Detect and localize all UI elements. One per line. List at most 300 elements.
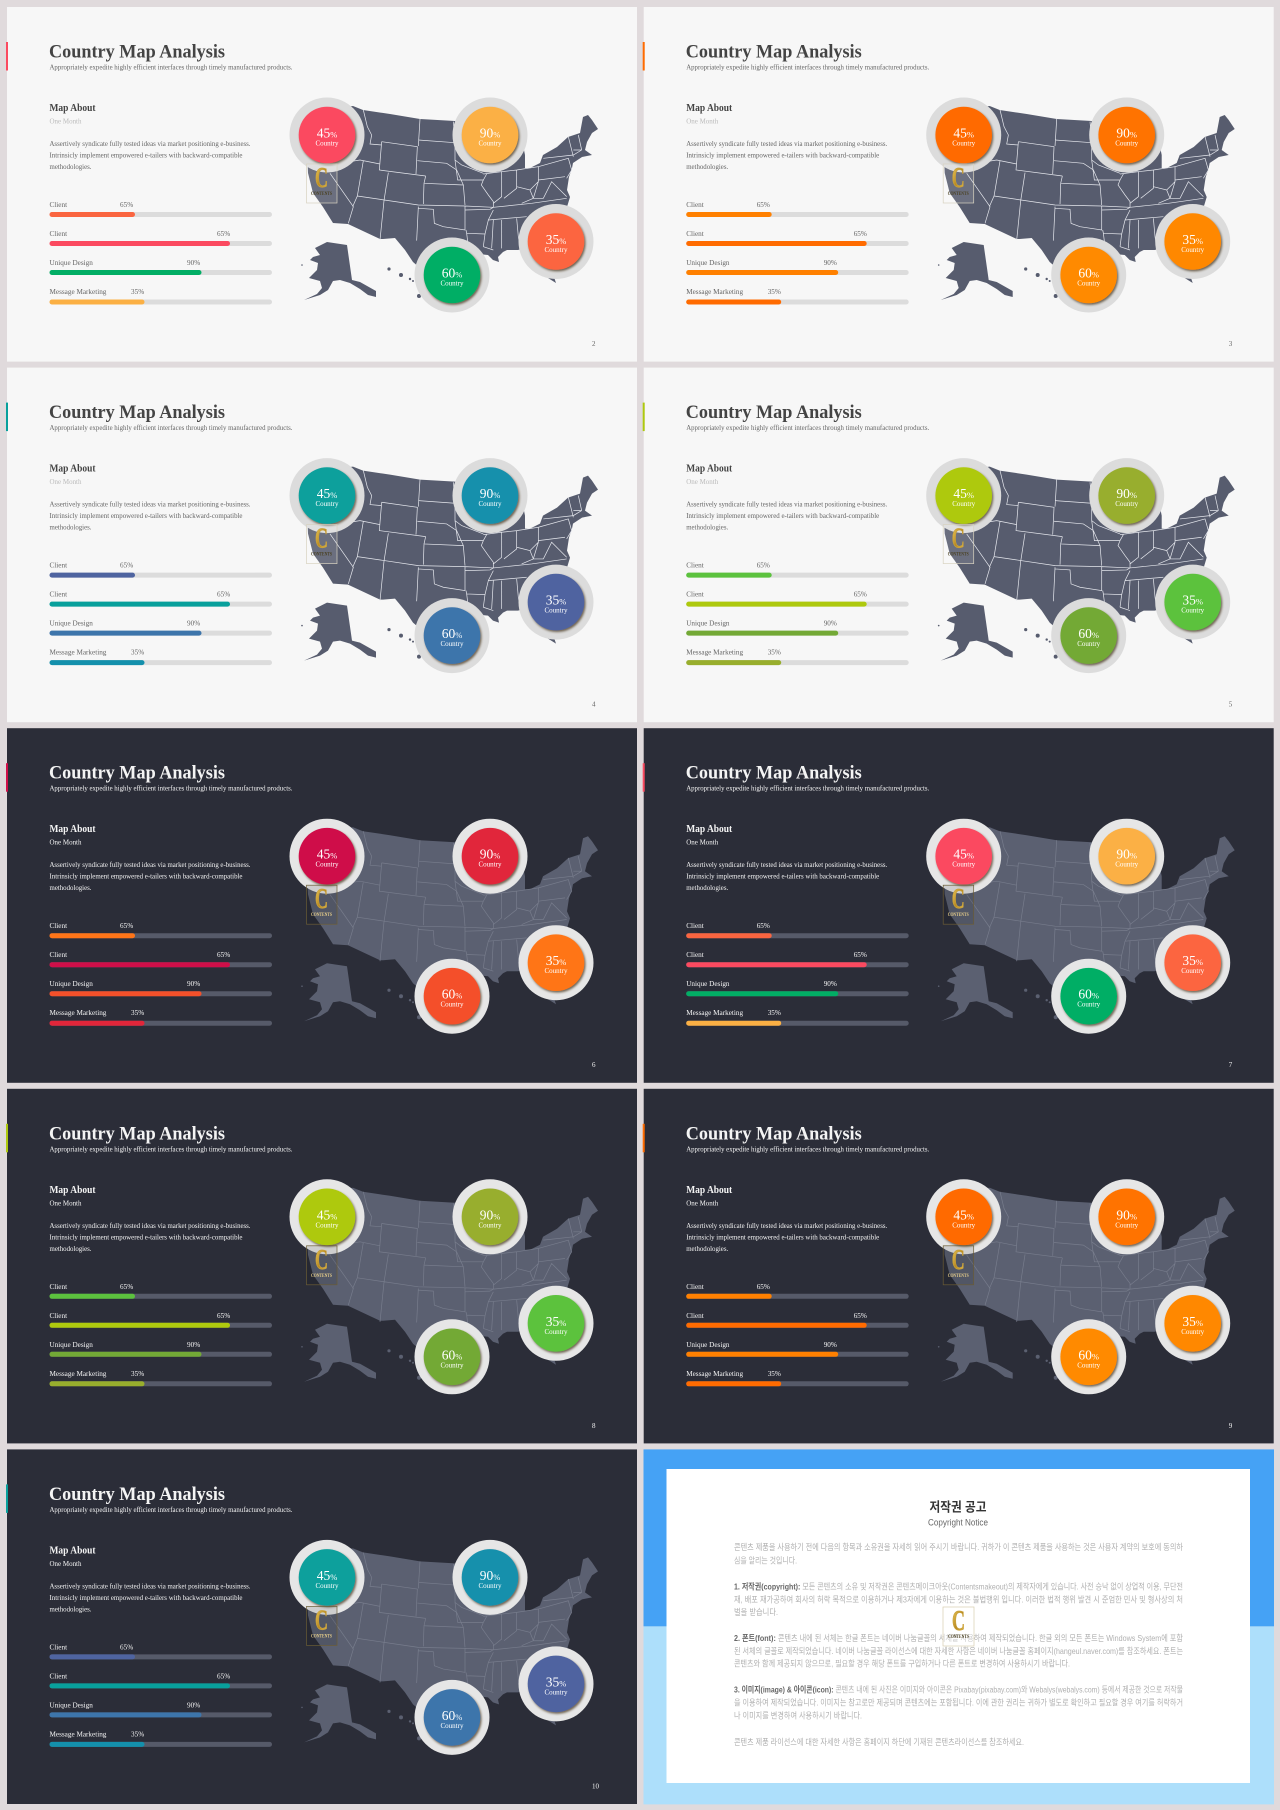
progress bars: 35%: [131, 649, 144, 657]
progress bars: Unique Design: [686, 1341, 730, 1349]
paragraph 1: copyright: [734, 1580, 1183, 1617]
circle 90%: 90%: [1116, 126, 1137, 140]
slide background: [7, 368, 637, 722]
circle 45%: Country: [952, 140, 976, 148]
circle 60%: Country: [441, 1361, 464, 1369]
circle 45%: [926, 819, 1001, 894]
body text: methodologies.: [50, 523, 92, 532]
body text: Assertively syndicate fully tested ideas via market positioning e-business.: [50, 139, 251, 148]
progress bars: 65%: [120, 1643, 133, 1651]
progress bars: [686, 562, 909, 665]
progress bars: Message Marketing: [50, 649, 107, 657]
watermark logo: [306, 1245, 337, 1285]
circle 35%: [1155, 925, 1230, 1000]
panel: slide 3 light orange: [643, 7, 1274, 362]
circle 45%: Country: [316, 500, 339, 508]
watermark logo: CONTENTS: [311, 192, 332, 197]
watermark logo: CONTENTS: [948, 1274, 969, 1279]
progress bars: 35%: [131, 1009, 144, 1017]
circle 90%: 90%: [1116, 486, 1137, 501]
watermark logo: C: [952, 1245, 965, 1276]
panel: slide 2 light multicolor: [6, 7, 637, 362]
watermark logo: [306, 163, 337, 203]
circle 45%: 45%: [953, 1207, 974, 1222]
slide background: [7, 7, 637, 362]
progress bars: Client: [686, 951, 704, 959]
progress bars: Client: [50, 1672, 67, 1680]
heading: map about: Map About: [50, 1545, 96, 1556]
circle 45%: Country: [952, 1221, 976, 1229]
circle 60%: Country: [441, 1722, 464, 1730]
circle 90%: Country: [1115, 140, 1139, 148]
circle 60%: [1051, 1319, 1126, 1394]
title: Country Map Analysis: [686, 402, 862, 423]
circle 90%: 90%: [1116, 847, 1137, 862]
accent tab: [643, 403, 645, 431]
page number: 8: [592, 1422, 596, 1430]
sub heading: One Month: [50, 116, 82, 126]
circle 45%: [926, 98, 1001, 172]
subtitle: Appropriately expedite highly efficient interfaces through timely manufactured products.: [50, 1144, 293, 1153]
accent tab: [643, 42, 645, 70]
body text: Intrinsicly implement empowered e-tailers with backward-compatible: [50, 511, 243, 520]
progress bars: 65%: [120, 201, 133, 209]
circle 60%: 60%: [442, 626, 462, 641]
circle 35%: [1155, 565, 1230, 640]
circle 60%: 60%: [442, 1347, 462, 1362]
sub heading: One Month: [686, 838, 718, 847]
body text: Assertively syndicate fully tested ideas via market positioning e-business.: [50, 1581, 251, 1590]
circle 90%: Country: [479, 1221, 502, 1229]
circle 35%: [518, 1286, 594, 1361]
progress bars: 65%: [217, 1672, 230, 1680]
US map: [301, 106, 598, 300]
subtitle: Appropriately expedite highly efficient interfaces through timely manufactured products.: [686, 1144, 929, 1153]
progress bars: Client: [686, 230, 704, 238]
title: Country Map Analysis: [686, 1123, 862, 1144]
circle 45%: 45%: [953, 486, 974, 501]
title: Country Map Analysis: [686, 42, 862, 62]
circle 60%: 60%: [1078, 987, 1099, 1002]
subtitle: Appropriately expedite highly efficient interfaces through timely manufactured products.: [686, 423, 929, 432]
accent tab: [6, 403, 8, 431]
subtitle: Appropriately expedite highly efficient interfaces through timely manufactured products.: [50, 423, 293, 432]
circle 35%: Country: [545, 607, 568, 615]
progress bars: 35%: [131, 1730, 144, 1738]
paragraph 3: image and icon: [734, 1684, 1183, 1720]
body text: Assertively syndicate fully tested ideas via market positioning e-business.: [686, 860, 887, 869]
watermark logo: C: [952, 163, 965, 194]
page number: 7: [1229, 1061, 1233, 1069]
body text: [686, 500, 887, 532]
progress bars: Client: [686, 1283, 704, 1291]
progress bars: 35%: [768, 288, 781, 296]
body text: [50, 500, 251, 532]
circle 45%: 45%: [317, 1568, 337, 1583]
accent tab: [6, 42, 8, 70]
body text: methodologies.: [50, 162, 92, 171]
slide background: [7, 1089, 637, 1443]
heading: map about: Map About: [686, 824, 733, 835]
circle 45%: Country: [316, 1582, 339, 1590]
panel: slide 5 light green: [643, 368, 1274, 722]
accent tab: [643, 763, 645, 792]
progress bars: 65%: [217, 230, 230, 238]
title: Country Map Analysis: [49, 42, 225, 62]
watermark logo: C: [315, 1245, 328, 1276]
panel: slide 6 dark red: [6, 728, 637, 1083]
progress bars: Unique Design: [50, 1341, 93, 1349]
body text: methodologies.: [686, 523, 728, 532]
slide background: [644, 7, 1274, 362]
circle 45%: Country: [952, 500, 976, 508]
progress bars: 65%: [854, 591, 867, 599]
circle 35%: 35%: [546, 232, 566, 247]
watermark logo: [943, 524, 974, 564]
paragraph 2: font: 콘텐츠와 함께 제공되지 않으므로, 필요할 경우 해당 폰트를 구입하거나 다른 폰트로 변경하여 사용하시기 바랍니다.: [734, 1658, 1070, 1668]
progress bars: 65%: [854, 951, 867, 959]
title: Country Map Analysis: [49, 763, 225, 784]
progress bars: Message Marketing: [50, 1009, 107, 1017]
circle 45%: 45%: [317, 847, 337, 862]
circle 90%: [1089, 819, 1164, 894]
watermark logo: C: [315, 524, 328, 555]
page number: 2: [592, 340, 596, 348]
progress bars: Client: [686, 562, 704, 570]
circle 60%: 60%: [1078, 1347, 1099, 1362]
circle 35%: [1155, 204, 1230, 279]
progress bars: 90%: [824, 620, 837, 628]
circle 35%: [518, 204, 594, 279]
page number: 4: [592, 701, 596, 709]
progress bars: Client: [686, 1312, 704, 1320]
body text: methodologies.: [50, 1604, 92, 1613]
progress bars: Client: [686, 591, 704, 599]
center watermark logo: [943, 1606, 974, 1646]
circle 35%: Country: [545, 246, 568, 254]
progress bars: Unique Design: [50, 259, 93, 267]
circle 35%: 35%: [1182, 232, 1203, 247]
light blue lower background: [644, 1626, 1274, 1804]
intro paragraph: 심을 알리는 것입니다.: [734, 1556, 797, 1566]
watermark logo: CONTENTS: [948, 192, 969, 197]
paragraph 1: copyright: 1. 저작권(copyright): 모든 콘텐츠의 소유 및 저작권은 콘텐츠메이크아웃(Contentsmakeout)의 제작자에게 있습니다. 사전 승낙 없이 상업적 이용, 무단전: [734, 1580, 1183, 1592]
heading: map about: Map About: [50, 824, 96, 835]
body text: methodologies.: [686, 162, 728, 171]
progress bars: 35%: [768, 649, 781, 657]
body text: [50, 860, 251, 892]
accent tab: [6, 1124, 8, 1152]
progress bars: Unique Design: [50, 980, 93, 988]
sub heading: One Month: [686, 1198, 718, 1207]
panel: slide 10 dark blue-teal: [6, 1449, 637, 1804]
watermark logo: C: [315, 1605, 328, 1636]
progress bars: 65%: [120, 562, 133, 570]
slide background: [644, 368, 1274, 722]
sub heading: One Month: [686, 477, 718, 486]
progress bars: [686, 201, 909, 304]
progress bars: 90%: [187, 259, 200, 267]
progress bars: Message Marketing: [686, 649, 743, 657]
circle 60%: 60%: [442, 1708, 462, 1723]
body text: Assertively syndicate fully tested ideas via market positioning e-business.: [50, 1221, 251, 1230]
progress bars: Unique Design: [50, 620, 93, 628]
circle 60%: 60%: [442, 266, 462, 280]
watermark logo: [306, 524, 337, 564]
US map: [301, 827, 598, 1021]
circle 35%: 35%: [546, 1674, 566, 1689]
circle 35%: Country: [545, 967, 568, 975]
progress bars: Client: [50, 1643, 67, 1651]
US map: [938, 1188, 1235, 1382]
circle 60%: 60%: [442, 987, 462, 1002]
progress bars: 65%: [217, 1312, 230, 1320]
body text: Assertively syndicate fully tested ideas via market positioning e-business.: [686, 139, 887, 148]
body text: methodologies.: [50, 883, 92, 892]
progress bars: 90%: [187, 620, 200, 628]
circle 90%: [452, 1540, 528, 1615]
progress bars: 35%: [768, 1009, 781, 1017]
body text: Intrinsicly implement empowered e-tailers with backward-compatible: [50, 1593, 243, 1602]
progress bars: 35%: [768, 1370, 781, 1378]
watermark logo: [306, 884, 337, 924]
progress bars: 65%: [217, 951, 230, 959]
slide background: [7, 728, 637, 1083]
closing line: 콘텐츠 제품 라이선스에 대한 자세한 사항은 홈페이지 하단에 기재된 콘텐츠라이선스를 참조하세요.: [734, 1736, 1024, 1747]
progress bars: Message Marketing: [686, 288, 743, 296]
circle 35%: [518, 1646, 594, 1721]
progress bars: 65%: [757, 562, 770, 570]
progress bars: 90%: [824, 259, 837, 267]
paragraph 1: copyright: 재, 배포 재가공하여 회사의 허락 목적으로 이용하거나 제3자에게 이용하는 것은 불법행위 입니다. 이러한 법적 행위 발견 시 준엄한 민사 및 형사상의 처: [734, 1594, 1183, 1604]
circle 90%: Country: [1115, 1221, 1139, 1229]
progress bars: 35%: [131, 1370, 144, 1378]
progress bars: Client: [50, 1312, 67, 1320]
watermark logo: CONTENTS: [311, 1274, 332, 1279]
page number: 9: [1229, 1422, 1233, 1430]
circle 90%: [452, 458, 528, 533]
paragraph 2: font: 2. 폰트(font): 콘텐츠 내에 된 서체는 한글 폰트는 네이버 나눔글꼴의 서체를 사용하여 제작되었습니다. 한글 외의 모든 폰트는 Windows System에 포함: [734, 1632, 1183, 1643]
progress bars: [686, 922, 909, 1026]
heading: map about: Map About: [686, 464, 733, 475]
accent tab: [6, 1484, 8, 1513]
progress bars: Client: [50, 562, 67, 570]
body text: methodologies.: [686, 883, 728, 892]
circle 45%: [290, 458, 364, 533]
circle 90%: 90%: [1116, 1207, 1137, 1222]
progress bars: 65%: [757, 201, 770, 209]
slide background: [644, 728, 1274, 1083]
circle 35%: [1155, 1286, 1230, 1361]
slide background: [7, 1449, 637, 1804]
body text: [686, 1221, 887, 1253]
korean title: 저작권 공고: [930, 1500, 987, 1514]
progress bars: 35%: [131, 288, 144, 296]
circle 60%: [414, 959, 490, 1034]
circle 90%: 90%: [480, 126, 500, 140]
circle 35%: Country: [1181, 607, 1205, 615]
circle 35%: Country: [1181, 967, 1205, 975]
body text: [686, 860, 887, 892]
body text: Assertively syndicate fully tested ideas via market positioning e-business.: [686, 1221, 887, 1230]
circle 90%: Country: [479, 140, 502, 148]
paragraph 2: font: 된 서체의 글꼴로 제작되었습니다. 네이버 나눔글꼴 라이선스에 대한 자세한 사항은 네이버 나눔글꼴 홈페이지(hangeul.naver.com)를 참조하세요. 폰트는: [734, 1645, 1183, 1656]
progress bars: 65%: [120, 922, 133, 930]
heading: map about: Map About: [50, 103, 96, 114]
body text: Assertively syndicate fully tested ideas via market positioning e-business.: [686, 500, 887, 509]
page number: 10: [592, 1782, 600, 1790]
circle 60%: Country: [1077, 280, 1101, 288]
body text: methodologies.: [50, 1244, 92, 1253]
watermark logo: [943, 1245, 974, 1285]
paragraph 3: image and icon: 을 이용하여 제작되었습니다. 이미지는 참고로만 제공되며 콘텐츠에는 포함됩니다. 이에 관한 권리는 귀하가 별도로 확인하고 필요할 경우 여기를 허락하거: [734, 1696, 1183, 1708]
US map: [938, 467, 1235, 661]
progress bars: 90%: [187, 1701, 200, 1709]
circle 45%: [290, 819, 364, 894]
watermark logo: C: [315, 884, 328, 915]
sub heading: One Month: [50, 477, 82, 486]
progress bars: Client: [50, 591, 67, 599]
subtitle: Appropriately expedite highly efficient interfaces through timely manufactured products.: [50, 1505, 293, 1514]
sub heading: One Month: [50, 1559, 82, 1568]
sub heading: One Month: [50, 1198, 82, 1207]
circle 90%: [1089, 1179, 1164, 1254]
progress bars: 65%: [120, 1283, 133, 1291]
circle 45%: Country: [316, 1221, 339, 1229]
circle 45%: [290, 98, 364, 172]
US map: [301, 1188, 598, 1382]
progress bars: 65%: [854, 1312, 867, 1320]
page number: 5: [1229, 701, 1233, 709]
circle 90%: Country: [479, 861, 502, 869]
title: Country Map Analysis: [49, 1484, 225, 1505]
heading: map about: Map About: [50, 464, 96, 475]
circle 90%: Country: [479, 500, 502, 508]
title: Country Map Analysis: [49, 402, 225, 423]
paragraph 2: font: [734, 1632, 1183, 1668]
progress bars: 65%: [757, 922, 770, 930]
US map: [938, 827, 1235, 1021]
circle 35%: [518, 565, 594, 640]
circle 45%: [926, 1179, 1001, 1254]
circle 35%: [518, 925, 594, 1000]
body text: Intrinsicly implement empowered e-tailers with backward-compatible: [686, 1232, 880, 1241]
circle 90%: [452, 819, 528, 894]
progress bars: [50, 1283, 272, 1386]
progress bars: Message Marketing: [50, 1730, 107, 1738]
center watermark logo: C: [952, 1606, 965, 1637]
progress bars: [50, 922, 272, 1026]
circle 90%: Country: [1115, 500, 1139, 508]
progress bars: Client: [50, 951, 67, 959]
page number: 6: [592, 1061, 596, 1069]
circle 35%: 35%: [546, 593, 566, 608]
body text: Intrinsicly implement empowered e-tailers with backward-compatible: [50, 872, 243, 881]
progress bars: 90%: [824, 980, 837, 988]
circle 90%: 90%: [480, 486, 500, 501]
circle 60%: Country: [441, 1001, 464, 1009]
progress bars: Unique Design: [50, 1701, 93, 1709]
progress bars: 90%: [824, 1341, 837, 1349]
circle 35%: 35%: [1182, 953, 1203, 968]
progress bars: 65%: [757, 1283, 770, 1291]
progress bars: Message Marketing: [50, 1370, 107, 1378]
center watermark logo: CONTENTS: [948, 1635, 969, 1640]
body text: [686, 139, 887, 171]
progress bars: [50, 201, 272, 304]
progress bars: [50, 1643, 272, 1747]
circle 90%: 90%: [480, 1207, 500, 1222]
paragraph 1: copyright: 벌을 받습니다.: [734, 1607, 778, 1617]
circle 60%: Country: [1077, 640, 1101, 648]
progress bars: [686, 1283, 909, 1386]
subtitle: Appropriately expedite highly efficient interfaces through timely manufactured products.: [50, 62, 293, 72]
US map: [301, 1548, 598, 1742]
circle 60%: [1051, 238, 1126, 312]
watermark logo: CONTENTS: [311, 1634, 332, 1639]
body text: Intrinsicly implement empowered e-tailers with backward-compatible: [50, 150, 243, 160]
circle 60%: [1051, 959, 1126, 1034]
circle 60%: Country: [1077, 1361, 1101, 1369]
english subtitle: Copyright Notice: [928, 1518, 988, 1528]
body text: [50, 1221, 251, 1253]
progress bars: 65%: [854, 230, 867, 238]
heading: map about: Map About: [686, 103, 733, 114]
progress bars: Unique Design: [686, 259, 730, 267]
subtitle: Appropriately expedite highly efficient interfaces through timely manufactured products.: [50, 784, 293, 793]
circle 90%: [1089, 98, 1164, 172]
circle 45%: 45%: [953, 126, 974, 140]
accent tab: [643, 1124, 645, 1152]
panel: slide 8 dark green: [6, 1089, 637, 1443]
accent tab: [6, 763, 8, 792]
watermark logo: CONTENTS: [948, 913, 969, 918]
paragraph 3: image and icon: 나 이미지를 변경하여 사용하시기 바랍니다.: [734, 1710, 862, 1720]
panel: slide 4 light blue-teal: [6, 368, 637, 722]
US map: [301, 467, 598, 661]
circle 45%: Country: [316, 140, 339, 148]
subtitle: Appropriately expedite highly efficient interfaces through timely manufactured products.: [686, 62, 929, 72]
circle 35%: 35%: [546, 953, 566, 968]
title: Country Map Analysis: [686, 763, 862, 784]
circle 45%: 45%: [317, 126, 337, 140]
intro paragraph: [734, 1541, 1183, 1566]
white card: [666, 1469, 1250, 1783]
progress bars: Message Marketing: [686, 1009, 743, 1017]
watermark logo: [943, 163, 974, 203]
panel: slide 7 dark multicolor: [643, 728, 1274, 1083]
watermark logo: CONTENTS: [948, 553, 969, 558]
watermark logo: [306, 1605, 337, 1645]
circle 35%: 35%: [1182, 1314, 1203, 1329]
circle 35%: Country: [545, 1688, 568, 1696]
watermark logo: [943, 884, 974, 924]
circle 60%: [414, 598, 490, 673]
body text: Intrinsicly implement empowered e-tailers with backward-compatible: [686, 872, 880, 881]
body text: methodologies.: [686, 1244, 728, 1253]
circle 35%: Country: [545, 1328, 568, 1336]
body text: Assertively syndicate fully tested ideas via market positioning e-business.: [50, 500, 251, 509]
circle 35%: 35%: [1182, 593, 1203, 608]
progress bars: Client: [686, 201, 704, 209]
circle 45%: [290, 1179, 364, 1254]
circle 35%: Country: [1181, 246, 1205, 254]
progress bars: Client: [50, 201, 67, 209]
watermark logo: CONTENTS: [311, 913, 332, 918]
circle 60%: Country: [441, 640, 464, 648]
circle 45%: 45%: [317, 1207, 337, 1222]
body text: Intrinsicly implement empowered e-tailers with backward-compatible: [686, 150, 880, 160]
